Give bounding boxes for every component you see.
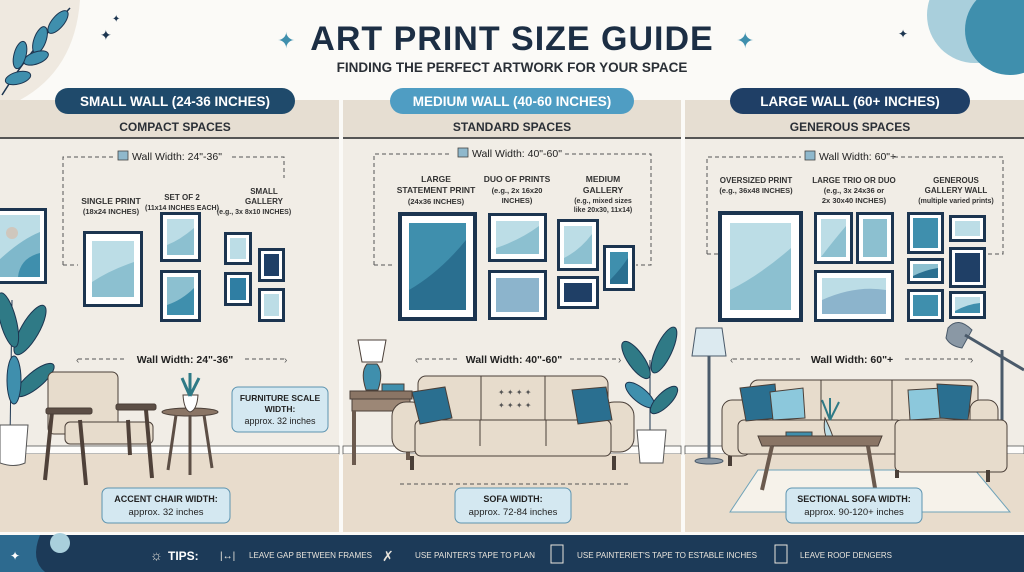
- decoration: top-left leaves: ✦: [100, 27, 112, 43]
- tip 1: |↔|: [220, 551, 235, 562]
- callout: furniture scale: WIDTH:: [265, 404, 296, 414]
- sectional sofa: [722, 380, 1007, 482]
- large statement print: STATEMENT PRINT: [397, 185, 476, 195]
- tips: lightbulb icon and label: ☼: [150, 547, 163, 563]
- callout: sofa width: [455, 488, 571, 523]
- large wall width arrow: Wall Width: 60"+: [811, 354, 893, 366]
- panel: small wall: [0, 100, 339, 532]
- tip 1: LEAVE GAP BETWEEN FRAMES: [249, 550, 372, 560]
- tip 4: LEAVE ROOF DENGERS: [800, 550, 892, 560]
- tip 3: [551, 545, 757, 563]
- plant: small panel: [0, 291, 59, 466]
- small wall width arrow: Wall Width: 24"-36": [137, 354, 233, 366]
- floor lamp right: [946, 322, 1024, 460]
- panel: medium wall: [343, 100, 681, 532]
- small wall width label: Wall Width: 24"-36": [132, 151, 222, 163]
- decoration: top-left leaves: [0, 0, 120, 100]
- heading pill: medium wall: MEDIUM WALL (40-60 INCHES): [413, 94, 611, 109]
- duo of prints: [484, 174, 551, 320]
- generous gallery wall: [907, 176, 994, 322]
- set of 2: [145, 193, 219, 322]
- subheading: compact: COMPACT SPACES: [119, 120, 231, 134]
- callout: sofa width: approx. 72-84 inches: [469, 507, 558, 518]
- generous gallery wall: GENEROUS: [933, 176, 980, 185]
- decoration: top-right blobs: ✦: [898, 27, 908, 41]
- small gallery: SMALL: [250, 187, 278, 196]
- frame: offset left: [0, 208, 47, 284]
- callout: accent chair width: approx. 32 inches: [128, 507, 204, 518]
- sofa: ✦ ✦ ✦ ✦: [498, 401, 532, 410]
- side table with plant: [162, 373, 218, 475]
- sofa width arrow: [400, 483, 628, 485]
- subtitle: FINDING THE PERFECT ARTWORK FOR YOUR SPACE: [337, 60, 687, 75]
- small gallery: (e.g., 3x 8x10 INCHES): [217, 209, 291, 216]
- small gallery: GALLERY: [245, 197, 284, 206]
- oversized print: [718, 176, 803, 322]
- side table with lamp: [350, 340, 412, 465]
- large wall width label: Wall Width: 60"+: [819, 151, 896, 163]
- set of 2: (11x14 INCHES EACH): [145, 205, 219, 212]
- medium gallery: MEDIUM: [586, 174, 620, 184]
- medium wall width arrow: Wall Width: 40"-60": [466, 354, 562, 366]
- medium gallery: [557, 174, 635, 309]
- large trio or duo: (e.g., 3x 24x36 or: [824, 186, 884, 195]
- medium gallery: like 20x30, 11x14): [574, 207, 632, 214]
- decoration: top-left leaves: ✦: [112, 14, 120, 25]
- medium wall width label: Wall Width: 40"-60": [472, 148, 562, 160]
- generous gallery wall: GALLERY WALL: [925, 186, 987, 195]
- medium wall dimension bracket: [374, 154, 651, 265]
- heading pill: large wall: LARGE WALL (60+ INCHES): [760, 94, 940, 109]
- floor lamp left: [692, 328, 726, 464]
- sofa: [392, 376, 634, 470]
- large wall width arrow: ›: [970, 355, 973, 366]
- plant: medium panel: [617, 324, 682, 463]
- small wall width arrow: ‹: [76, 355, 79, 366]
- callout: sofa width: SOFA WIDTH:: [483, 494, 543, 504]
- accent chair: [45, 372, 156, 485]
- large trio or duo: 2x 30x40 INCHES): [822, 196, 887, 205]
- tips: lightbulb icon and label: [150, 547, 199, 563]
- tip 2: USE PAINTER'S TAPE TO PLAN: [415, 550, 535, 560]
- medium wall width arrow: ›: [618, 355, 621, 366]
- callout: furniture scale: [232, 387, 328, 432]
- single print: SINGLE PRINT: [81, 196, 142, 206]
- subheading: generous: GENEROUS SPACES: [790, 120, 910, 134]
- sofa: ✦ ✦ ✦ ✦: [498, 388, 532, 397]
- rug: [730, 470, 1010, 512]
- single print: (18x24 INCHES): [83, 207, 140, 216]
- callout: accent chair width: [102, 488, 230, 523]
- single print: [81, 196, 143, 307]
- large wall width arrow: ‹: [730, 355, 733, 366]
- heading pill: small wall: [55, 88, 295, 114]
- large trio or duo: [812, 176, 896, 322]
- large statement print: LARGE: [421, 174, 451, 184]
- oversized print: OVERSIZED PRINT: [720, 176, 792, 185]
- large trio or duo: LARGE TRIO OR DUO: [812, 176, 896, 185]
- callout: furniture scale: approx. 32 inches: [244, 416, 316, 426]
- medium wall width arrow: [415, 354, 621, 366]
- heading pill: large wall: [730, 88, 970, 114]
- medium gallery: GALLERY: [583, 185, 623, 195]
- set of 2: SET OF 2: [164, 193, 200, 202]
- small wall width arrow: [76, 354, 287, 366]
- decoration: top-right blobs: [898, 0, 1024, 75]
- duo of prints: DUO OF PRINTS: [484, 174, 551, 184]
- small wall width arrow: ›: [284, 355, 287, 366]
- coffee table with vase: [758, 398, 882, 490]
- tip 3: USE PAINTERIET'S TAPE TO ESTABLE INCHES: [577, 550, 757, 560]
- heading pill: medium wall: [390, 88, 634, 114]
- large statement print: [397, 174, 477, 321]
- tip 1: [220, 550, 372, 562]
- heading pill: small wall: SMALL WALL (24-36 INCHES): [80, 94, 270, 109]
- panel: large wall: [685, 100, 1024, 532]
- subheading: standard: STANDARD SPACES: [453, 120, 571, 134]
- tips bar: [0, 533, 1024, 572]
- large statement print: (24x36 INCHES): [408, 197, 465, 206]
- large wall dimension bracket: [707, 157, 1003, 254]
- tips bar: ✦: [10, 549, 20, 563]
- oversized print: (e.g., 36x48 INCHES): [719, 186, 793, 195]
- generous gallery wall: (multiple varied prints): [918, 198, 994, 205]
- medium wall width arrow: ‹: [415, 355, 418, 366]
- callout: sectional sofa width: approx. 90-120+ inches: [804, 507, 904, 518]
- large wall width arrow: [730, 354, 973, 366]
- small gallery: [217, 187, 291, 322]
- tip 4: [775, 545, 892, 563]
- medium gallery: (e.g., mixed sizes: [574, 198, 632, 205]
- tips: lightbulb icon and label: TIPS:: [168, 549, 199, 563]
- duo of prints: (e.g., 2x 16x20: [492, 186, 542, 195]
- callout: furniture scale: FURNITURE SCALE: [240, 393, 320, 403]
- title: ✦: [277, 28, 295, 53]
- tip 2: ✗: [382, 548, 394, 564]
- callout: sectional sofa width: SECTIONAL SOFA WIDTH:: [797, 494, 911, 504]
- title: ART PRINT SIZE GUIDE: [310, 20, 714, 58]
- callout: accent chair width: ACCENT CHAIR WIDTH:: [114, 494, 218, 504]
- callout: sectional sofa width: [786, 488, 922, 523]
- tip 2: [382, 548, 535, 564]
- duo of prints: INCHES): [502, 196, 533, 205]
- small wall dimension bracket: [63, 157, 284, 265]
- title: ✦: [736, 28, 754, 53]
